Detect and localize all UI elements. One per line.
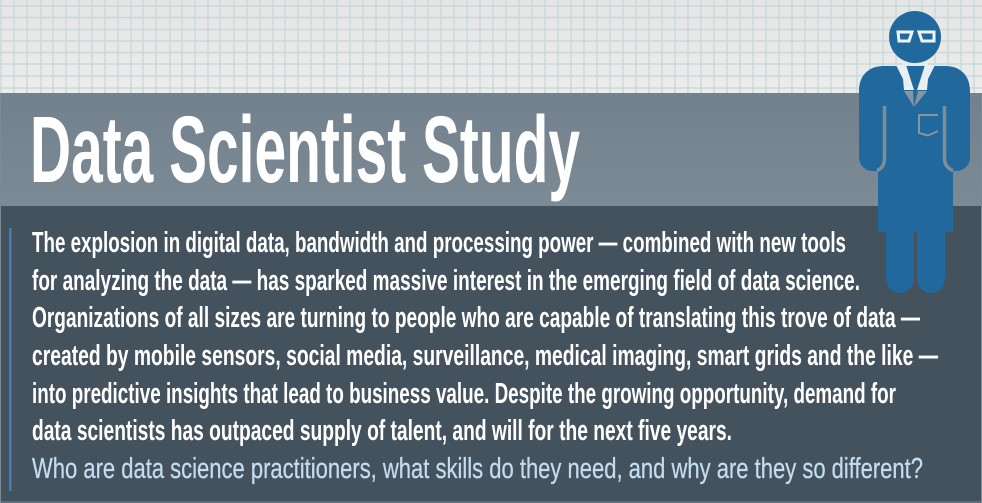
title: Data Scientist Study [30,97,580,203]
neck edge [902,63,928,65]
text block: introduction [32,227,938,447]
accent bar [9,228,12,491]
panel: title band [0,93,982,206]
icon: data scientist figure [859,11,970,293]
lab coat body and arms [859,66,970,232]
panel: intro text background [0,206,982,503]
pocket [919,115,938,136]
glasses [898,32,934,41]
legs [886,225,945,293]
collar [896,65,935,90]
head [889,11,941,63]
shirt shadow [904,91,927,107]
arm gaps [877,106,953,170]
panel: grid paper background [0,0,982,93]
